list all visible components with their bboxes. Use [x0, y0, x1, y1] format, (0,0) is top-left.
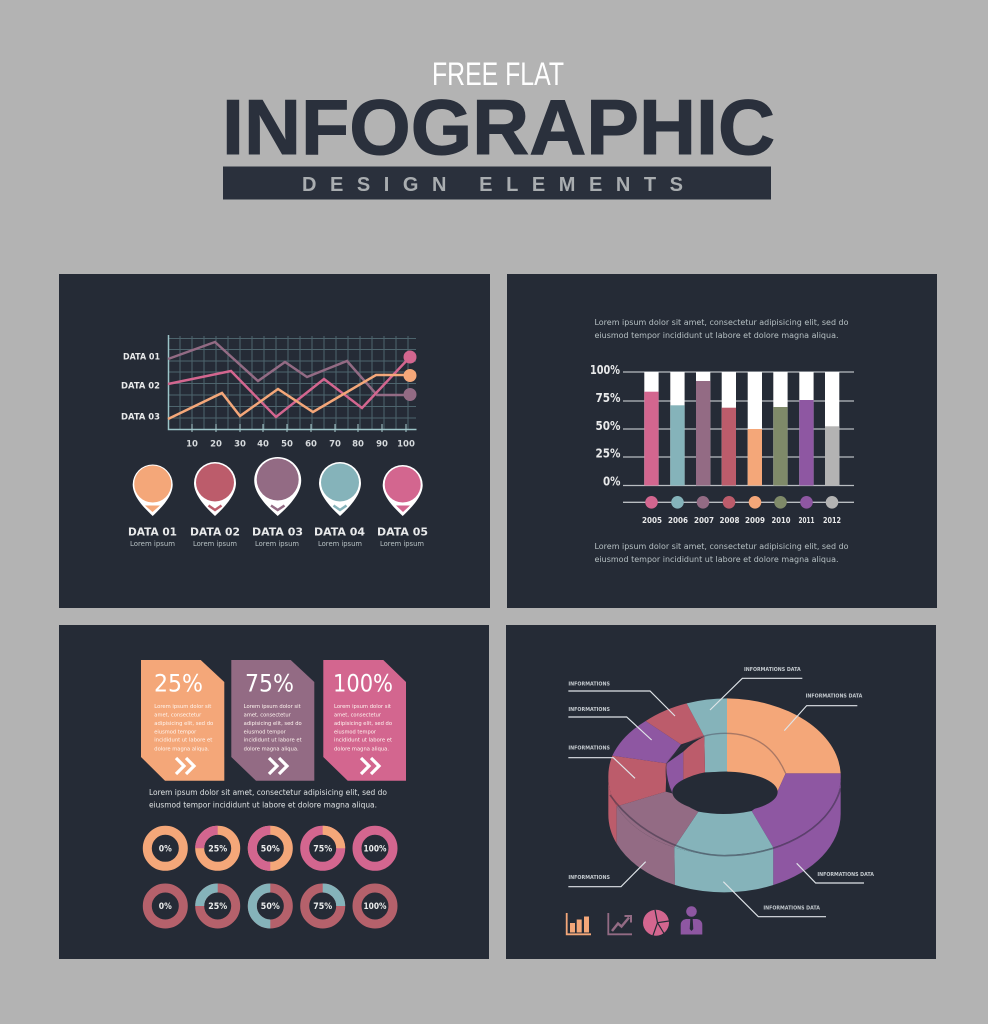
card: 25%: 25%	[154, 670, 203, 698]
card: 75%: amet, consectetur	[244, 712, 292, 718]
y axis percent labels: 50%	[596, 419, 620, 433]
x axis labels: 50	[281, 440, 293, 450]
y axis labels: DATA 03	[121, 412, 160, 422]
card: 100%: Lorem ipsum dolor sit	[334, 704, 391, 710]
year labels: 2008	[720, 516, 740, 525]
donut side walls	[608, 773, 841, 892]
year labels: 2005	[642, 516, 662, 525]
bar chart	[590, 363, 854, 525]
panel: line chart and pins	[59, 274, 490, 608]
card: 25%: eiusmod tempor	[154, 729, 197, 735]
year labels: 2006	[668, 516, 688, 525]
timeline dots	[623, 496, 854, 509]
x axis labels: 30	[234, 440, 246, 450]
ring percent labels: 50%	[261, 902, 280, 912]
heading: infographic: INFOGRAPHIC	[222, 83, 775, 171]
card: 25%	[141, 660, 224, 781]
line: data 01 mauve	[168, 342, 410, 395]
leader lines	[568, 678, 864, 917]
y axis percent labels: 75%	[596, 391, 620, 405]
x axis labels: 90	[376, 440, 388, 450]
x axis labels: 20	[210, 440, 222, 450]
donut labels	[568, 667, 874, 912]
text block: bottom paragraph: eiusmod tempor incididunt ut labore et dolore magna aliqua.	[594, 555, 838, 564]
pin: data 05	[377, 465, 428, 548]
panel: stacked bar chart	[507, 274, 937, 608]
pin: data 03: DATA 03	[252, 526, 303, 538]
pin: data 02: Lorem ipsum	[193, 540, 237, 548]
card: 75%: dolore magna aliqua.	[244, 746, 299, 752]
pin: data 04	[314, 462, 365, 548]
card: 75%: Lorem ipsum dolor sit	[244, 704, 301, 710]
pin: data 05: Lorem ipsum	[380, 540, 424, 548]
ring percent labels: 100%	[364, 902, 387, 912]
card: 100%: eiusmod tempor	[334, 729, 377, 735]
ring percent labels: 25%	[208, 902, 228, 912]
year labels: 2010	[772, 516, 790, 525]
card: 25%: incididunt ut labore et	[154, 738, 212, 744]
pin: data 04: Lorem ipsum	[318, 540, 362, 548]
donut labels: INFORMATIONS DATA	[744, 667, 801, 673]
donut hole	[672, 772, 778, 812]
donut labels: INFORMATIONS	[568, 746, 610, 752]
heading: free flat: FREE FLAT	[432, 56, 564, 92]
donut labels: INFORMATIONS	[568, 875, 610, 881]
x axis labels: 80	[352, 440, 364, 450]
panel: 3D donut chart	[506, 625, 936, 959]
donut labels: INFORMATIONS DATA	[763, 906, 820, 912]
card: 100%: amet, consectetur	[334, 712, 382, 718]
subtitle banner: DESIGN ELEMENTS	[302, 174, 683, 196]
donut labels: INFORMATIONS DATA	[806, 694, 862, 700]
ring percent labels: 75%	[313, 844, 333, 854]
card: 75%: 75%	[245, 670, 294, 698]
pin: data 05: DATA 05	[377, 526, 428, 538]
icon: person	[681, 906, 702, 934]
x axis labels: 40	[257, 440, 269, 450]
card: 100%: incididunt ut labore et	[334, 738, 392, 744]
pin: data 01	[128, 464, 177, 548]
ring percent labels	[159, 844, 387, 912]
y axis percent labels: 0%	[603, 474, 620, 488]
text block: paragraph	[149, 788, 387, 810]
subtitle banner	[223, 166, 771, 200]
pin: data 01: Lorem ipsum	[130, 540, 175, 548]
line: data 02 pink	[168, 357, 410, 417]
x axis labels: 60	[305, 440, 317, 450]
line end markers	[404, 350, 416, 401]
ring percent labels: 50%	[261, 844, 280, 854]
rings: orange and pink	[147, 830, 393, 866]
ring percent labels: 0%	[159, 844, 172, 854]
y axis percent labels: 100%	[590, 363, 620, 377]
card: 25%: amet, consectetur	[154, 712, 202, 718]
ring percent labels: 25%	[208, 844, 228, 854]
y axis percent labels: 25%	[596, 446, 620, 460]
donut labels: INFORMATIONS	[568, 681, 610, 687]
donut labels: INFORMATIONS	[568, 707, 610, 713]
card: 25%: Lorem ipsum dolor sit	[154, 704, 211, 710]
text block: top paragraph: Lorem ipsum dolor sit amet, consectetur adipisicing elit, sed do	[594, 318, 849, 327]
ring percent labels: 100%	[364, 844, 387, 854]
pin: data 02	[190, 462, 240, 548]
x axis labels	[186, 440, 415, 450]
card: 75%: adipisicing elit, sed do	[244, 721, 302, 727]
card: 100%: dolore magna aliqua.	[334, 746, 389, 752]
card: 25%: dolore magna aliqua.	[154, 746, 210, 752]
year labels: 2012	[823, 516, 841, 525]
card: 100%: adipisicing elit, sed do	[334, 721, 392, 727]
text block: top paragraph: eiusmod tempor incididunt ut labore et dolore magna aliqua.	[594, 331, 838, 340]
text block: top paragraph	[594, 318, 849, 340]
bars	[644, 372, 839, 486]
pin: data 03: Lorem ipsum	[255, 540, 299, 548]
donut labels: INFORMATIONS DATA	[817, 872, 874, 878]
pin: data 02: DATA 02	[190, 526, 240, 538]
line: data 03 orange	[168, 375, 410, 419]
ring percent labels: 75%	[313, 902, 333, 912]
header: title block	[222, 56, 775, 200]
year labels: 2011	[798, 516, 814, 525]
icon: bar chart	[567, 913, 591, 934]
card: 25%: adipisicing elit, sed do	[154, 721, 213, 727]
card: 100%: 100%	[333, 670, 393, 698]
text block: bottom paragraph: Lorem ipsum dolor sit amet, consectetur adipisicing elit, sed do	[594, 542, 849, 551]
ring percent labels: 0%	[159, 902, 172, 912]
card: 75%: eiusmod tempor	[244, 729, 287, 735]
y axis labels	[121, 352, 160, 422]
pin: data 04: DATA 04	[314, 526, 365, 538]
year labels	[642, 516, 841, 525]
panel: percent cards and rings	[59, 625, 489, 959]
y axis labels: DATA 01	[123, 352, 160, 362]
icon: pie chart	[643, 910, 669, 936]
pin: data 03	[252, 457, 303, 548]
year labels: 2007	[694, 516, 714, 525]
icon: line chart arrow	[608, 913, 632, 934]
text block: bottom paragraph	[594, 542, 849, 564]
card: 100%	[323, 660, 406, 781]
y axis percent labels	[590, 363, 620, 488]
y axis labels: DATA 02	[121, 382, 160, 392]
pin: data 01: DATA 01	[128, 526, 177, 538]
x axis labels: 10	[186, 440, 198, 450]
donut top segments	[608, 698, 841, 855]
line chart	[121, 335, 416, 450]
year labels: 2009	[745, 516, 765, 525]
text block: paragraph: Lorem ipsum dolor sit amet, consectetur adipisicing elit, sed do	[149, 788, 387, 797]
card: 75%	[231, 660, 314, 781]
card: 75%: incididunt ut labore et	[244, 738, 302, 744]
text block: paragraph: eiusmod tempor incididunt ut labore et dolore magna aliqua.	[149, 800, 377, 810]
rings: red and teal	[147, 888, 393, 924]
x axis labels: 70	[329, 440, 341, 450]
x axis labels: 100	[397, 440, 415, 450]
donut chart	[568, 667, 874, 917]
